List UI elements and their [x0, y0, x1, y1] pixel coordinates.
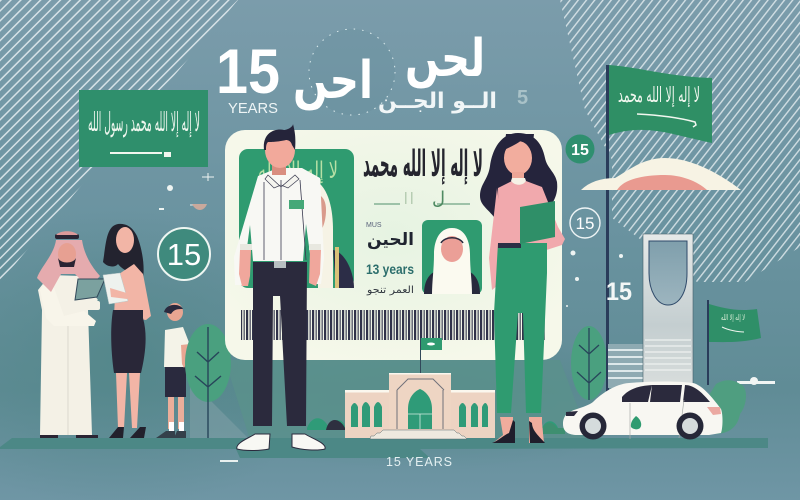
sparkles: [159, 173, 214, 210]
ground: [0, 438, 768, 458]
striped plinth: [608, 344, 644, 388]
small flag on building: [420, 338, 442, 373]
dashed circle ornament: [309, 29, 395, 115]
footer label: 15 years: 15 YEARS: [386, 455, 452, 469]
arabic heading: [293, 29, 485, 111]
kingdom tower: [643, 234, 693, 386]
bushes beside building: [307, 418, 558, 430]
small flag: [707, 300, 761, 385]
arabic heading: لحں: [405, 29, 485, 89]
title: 15 years: YEARS: [228, 100, 278, 117]
badge: 15 dark green: [566, 134, 594, 164]
photo panel: large: [239, 149, 354, 288]
photo panel: small: [422, 220, 482, 294]
text: لا إله إلا الله محمد رسول الله: [88, 108, 200, 138]
card fields: 13 years: [366, 262, 414, 277]
cloud canopy: [581, 158, 741, 190]
person: woman with clipboard: [103, 224, 151, 438]
person: man in thobe: [37, 231, 105, 439]
faded number: 5: [517, 87, 528, 109]
id card: [225, 130, 562, 360]
card fields: [366, 222, 414, 296]
title: 15 years: 15: [216, 37, 280, 107]
badge: 15 outlined: [570, 208, 600, 238]
number 15: 15: [606, 278, 632, 306]
flagpole with large flag: لا إله إلا الله محمد: [618, 83, 700, 108]
badge: 15 left: [158, 228, 210, 280]
card divider text: ل: [432, 188, 445, 209]
bushes behind car: [543, 380, 746, 434]
left flag: [79, 90, 208, 167]
sparkles right: [566, 250, 623, 307]
tree: left: [185, 324, 231, 438]
barcode: [241, 310, 546, 340]
card divider text: [374, 188, 470, 209]
tree: right: [571, 326, 607, 400]
flagpole with large flag: [606, 65, 712, 400]
id card: لا إله إلا الله محمد: [363, 144, 483, 185]
person: woman with green folder: [480, 133, 565, 443]
car: [563, 382, 722, 440]
arabic subheading: الــو الجــن: [378, 89, 497, 114]
badge: 15 outlined: 15: [576, 214, 594, 233]
road dash: [220, 460, 238, 462]
cloud dash: [737, 377, 775, 385]
small flag: لا إله إلا الله: [721, 313, 745, 323]
arabic heading: احں: [293, 51, 373, 111]
card fields: MUS: [366, 222, 382, 229]
person: boy: [156, 303, 192, 438]
badge: 15 left: 15: [167, 237, 201, 272]
building: [345, 373, 495, 439]
card fields: الحين: [367, 230, 414, 250]
photo panel: large: لا إله إلا الله: [258, 158, 338, 184]
badge: 15 dark green: 15: [571, 142, 589, 159]
person: man in white shirt: [234, 124, 325, 450]
card fields: العمر تنجو: [366, 285, 414, 296]
